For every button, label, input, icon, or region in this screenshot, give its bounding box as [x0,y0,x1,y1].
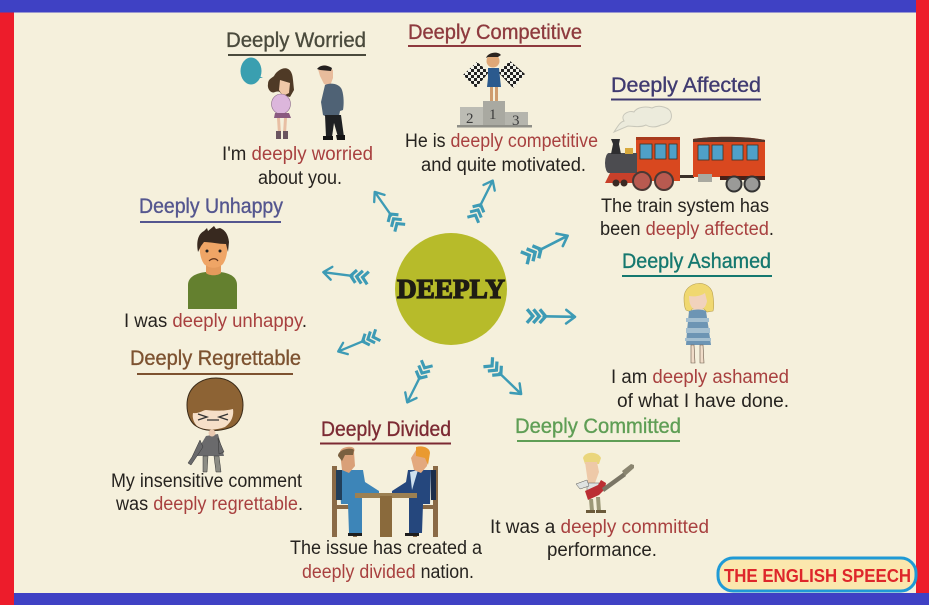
panel: deeply divided [290,418,482,583]
icon: unhappy boy [188,226,237,309]
arrow: to deeply competitive [467,178,498,223]
icon: worried couple [240,58,345,140]
arrow: to deeply worried [370,188,405,232]
panel: deeply regrettable [111,347,303,515]
panel: deeply unhappy [124,195,307,332]
icon: guitarist [576,453,634,513]
panel: deeply affected [600,74,774,240]
arrow: to deeply unhappy [322,266,369,284]
heading: deeply committed: Deeply Committed [515,415,681,438]
arrow: to deeply divided [402,360,433,405]
arrow: to deeply committed [483,357,526,399]
text: unhappy sentence: I was deeply unhappy. [124,311,307,332]
arrow: to deeply regrettable [336,329,380,357]
text: regrettable sentence: My insensitive comment [111,471,303,492]
central circle: DEEPLY [395,233,507,345]
text: competitive sentence: He is deeply competitive [405,131,598,152]
panel: deeply ashamed [611,250,789,412]
panel: deeply competitive: and quite motivated. [421,155,586,176]
panel: deeply committed [490,415,709,561]
icon: regretful girl [187,378,243,472]
panel: deeply divided: deeply divided nation. [302,562,474,583]
arrow: to deeply ashamed [527,309,575,324]
panel: deeply competitive [405,21,598,176]
icon: two men at a table [332,446,438,537]
heading: deeply divided: Deeply Divided [321,418,451,441]
central circle: DEEPLY: DEEPLY [397,274,505,304]
icon: steam train [605,106,765,192]
panel: deeply regrettable: was deeply regrettable. [115,494,303,515]
text: worried sentence: I'm deeply worried [222,144,373,165]
panel: deeply ashamed: of what I have done. [617,391,789,412]
icon: winner on podium [457,53,532,129]
heading: deeply ashamed: Deeply Ashamed [622,250,771,273]
panel: deeply committed: performance. [547,540,657,561]
heading: deeply competitive: Deeply Competitive [408,21,582,44]
icon: winner on podium: 3 [512,113,520,129]
panel: deeply worried: about you. [258,168,342,189]
logo badge: the english speech [718,558,916,591]
heading: deeply regrettable: Deeply Regrettable [130,347,301,370]
arrow: to deeply affected [521,230,571,264]
heading: deeply unhappy: Deeply Unhappy [139,195,283,218]
panel: deeply affected: been deeply affected. [600,219,774,240]
text: ashamed sentence: I am deeply ashamed [611,367,789,388]
heading: deeply worried: Deeply Worried [226,29,366,52]
panel: deeply worried [222,29,373,189]
heading: deeply affected: Deeply Affected [611,74,761,97]
icon: winner on podium: 2 [466,111,474,127]
icon: ashamed girl [684,283,714,363]
text: affected sentence: The train system has [601,196,769,217]
text: committed sentence: It was a deeply committed [490,517,709,538]
logo badge: the english speech: THE ENGLISH SPEECH [724,566,911,586]
text: divided sentence: The issue has created a [290,538,482,559]
icon: winner on podium: 1 [489,107,496,123]
